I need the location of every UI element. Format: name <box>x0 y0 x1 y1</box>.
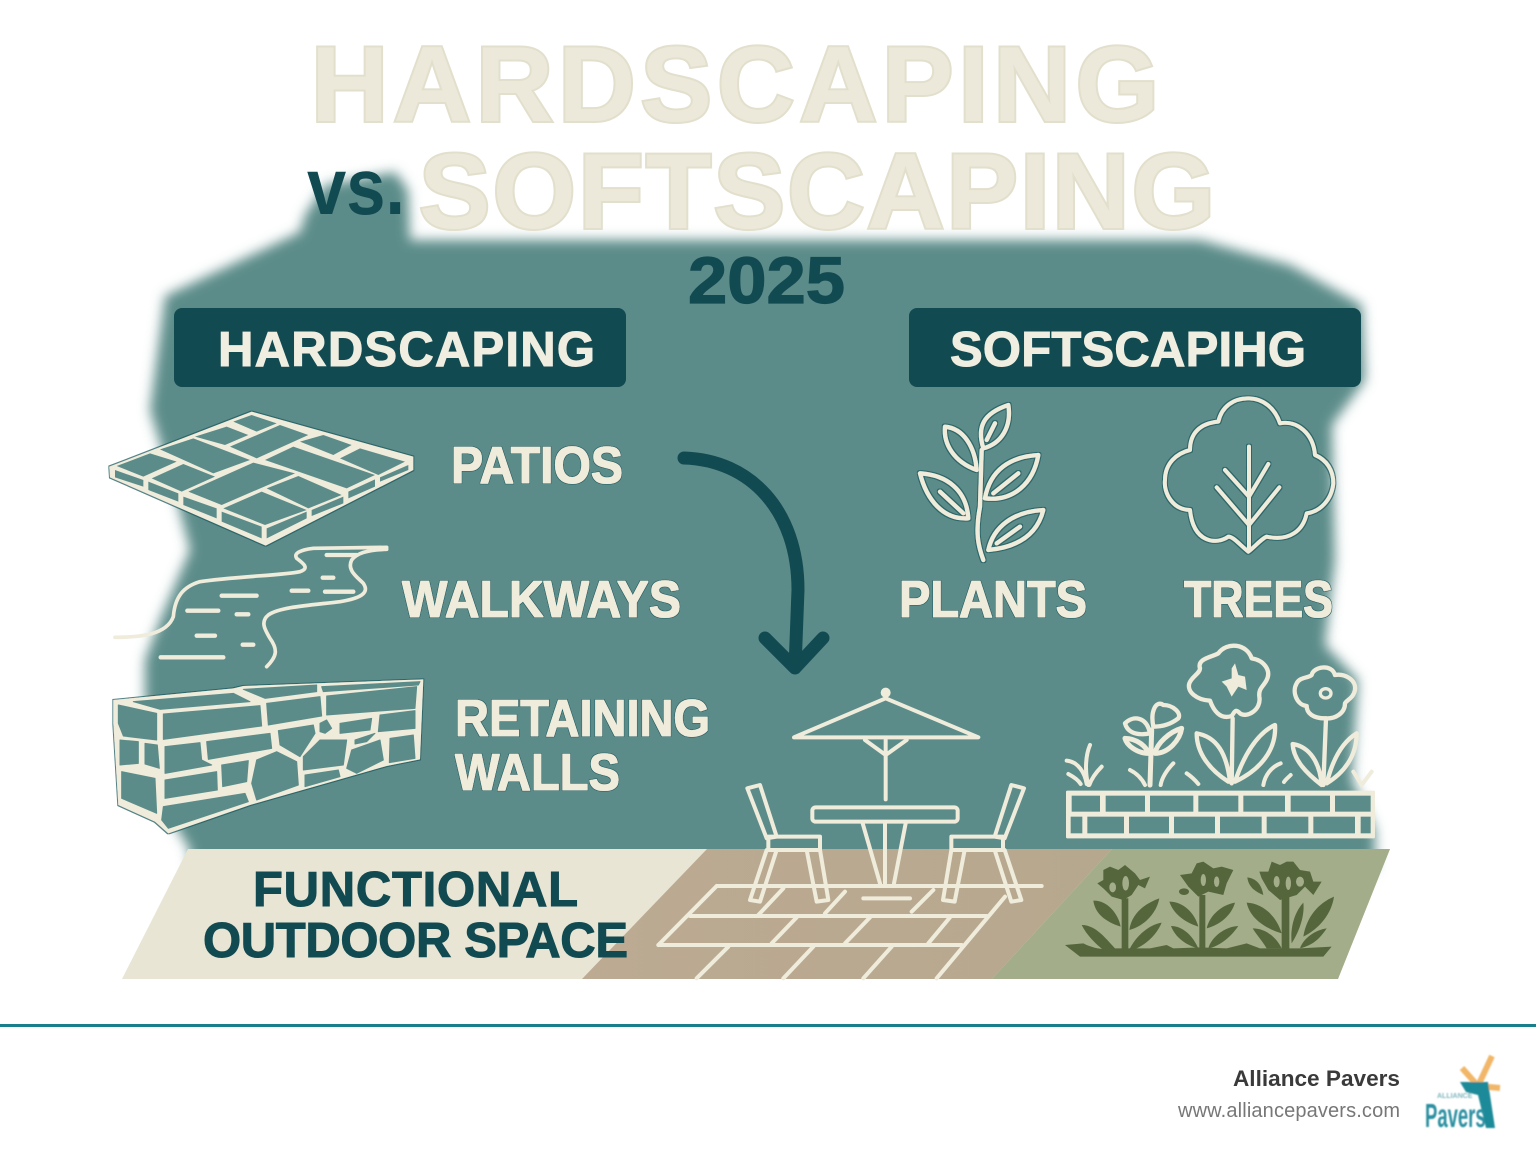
label: retaining walls: RETAINING <box>455 690 710 748</box>
icon: logo: Pavers <box>1425 1097 1486 1134</box>
icon: tree <box>1165 398 1333 552</box>
label: functional outdoor space <box>203 863 628 968</box>
footer: website: www.alliancepavers.com <box>1177 1100 1400 1122</box>
icon: flower bed with brick border <box>1066 646 1375 838</box>
icon: logo: ALLIANCE <box>1437 1093 1473 1100</box>
icon: patio pavers <box>109 412 413 546</box>
icon: plant <box>920 405 1043 560</box>
title: SOFTSCAPING <box>419 131 1215 251</box>
label: functional outdoor space: FUNCTIONAL <box>253 863 578 917</box>
heading: hardscaping <box>174 308 626 387</box>
title <box>307 24 1215 251</box>
year: 2025 <box>688 243 845 317</box>
heading: hardscaping: HARDSCAPING <box>218 323 595 377</box>
footer divider <box>0 1024 1536 1027</box>
arrow <box>684 458 823 668</box>
label: patios: PATIOS <box>451 437 623 495</box>
title: vs. <box>307 142 405 231</box>
icon: walkway <box>115 547 387 667</box>
title: HARDSCAPING <box>311 24 1159 144</box>
label: plants: PLANTS <box>899 571 1087 629</box>
icon: logo <box>1425 1056 1500 1134</box>
label: retaining walls: WALLS <box>455 744 620 802</box>
label: retaining walls <box>455 690 710 802</box>
background panel: teal brush shape <box>145 172 1375 870</box>
footer: brand name: Alliance Pavers <box>1233 1066 1400 1091</box>
icon: retaining wall <box>113 679 423 833</box>
label: trees: TREES <box>1184 571 1333 629</box>
label: functional outdoor space: OUTDOOR SPACE <box>203 914 628 968</box>
panel: ground strip <box>122 849 1390 979</box>
icon: dark green plants <box>1065 862 1334 957</box>
label: walkways: WALKWAYS <box>402 571 681 629</box>
heading: softscaping: SOFTSCAPIHG <box>950 323 1306 377</box>
icon: patio table with umbrella and pavers <box>658 690 1042 978</box>
heading: softscaping <box>909 308 1361 387</box>
